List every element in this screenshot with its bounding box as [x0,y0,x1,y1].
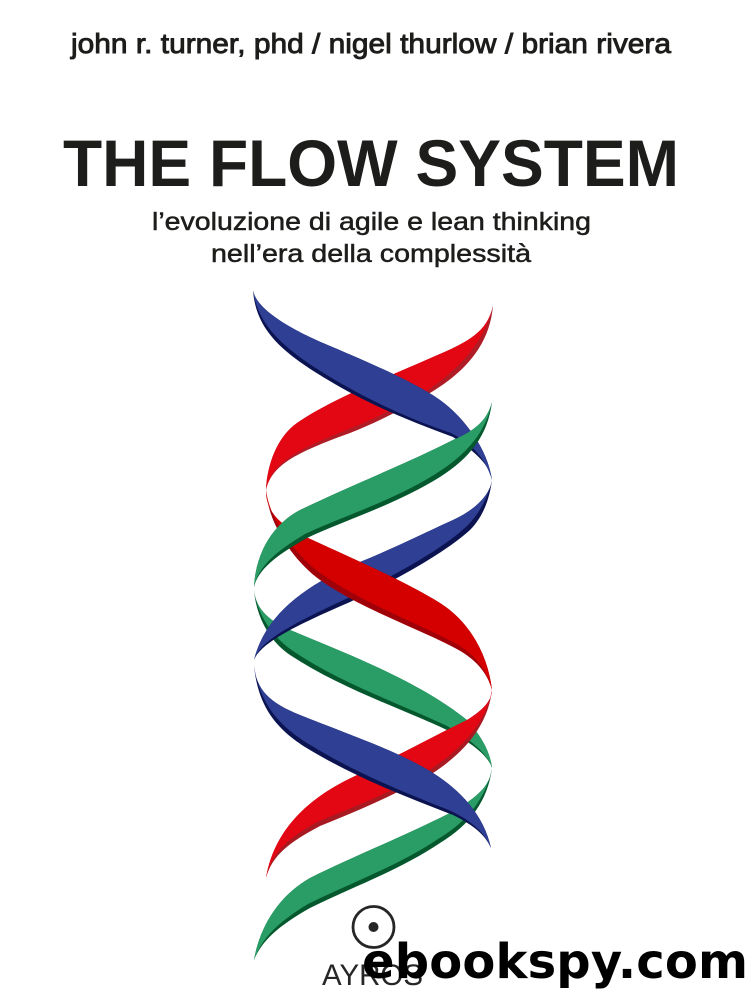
ribbon: green lower [254,768,492,960]
ribbon: blue upper [253,290,492,480]
watermark: ebookspy.com [362,934,748,990]
ribbon: red upper [266,305,493,490]
ribbon: red middle [266,490,492,690]
subtitle: l’evoluzione di agile e lean thinking [152,208,591,236]
ribbon: green middle [254,590,492,768]
ribbon: green upper [254,402,492,587]
authors line: john r. turner, phd / nigel thurlow / brian rivera [70,28,671,59]
subtitle [152,208,591,268]
publisher logo [322,906,423,992]
ribbon: blue middle [254,480,492,660]
subtitle: nell’era della complessità [211,240,531,268]
helix illustration [253,290,493,960]
ribbon: red lower [266,690,492,878]
publisher name: AYROS [322,959,423,992]
title: THE FLOW SYSTEM [63,126,679,200]
ribbon: blue lower [254,665,491,848]
logo ring with dot [353,906,394,948]
